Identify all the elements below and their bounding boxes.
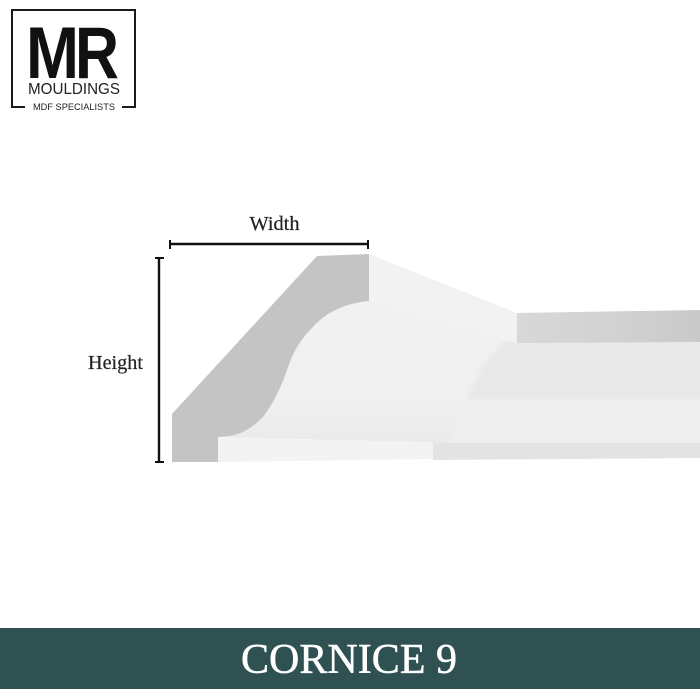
title banner: CORNICE 9 — [241, 637, 457, 683]
moulding: curved front body — [218, 301, 700, 443]
cornice moulding illustration — [172, 254, 700, 462]
moulding: top face — [369, 254, 517, 343]
moulding: receding wall face — [517, 310, 700, 343]
logo: MR Mouldings: MOULDINGS — [28, 81, 120, 98]
moulding: upper receding band — [467, 338, 700, 400]
moulding: lower lip receding face — [433, 443, 700, 460]
width dimension arrow — [170, 240, 368, 249]
logo: MR Mouldings: MDF SPECIALISTS — [33, 102, 115, 113]
height label: Height — [88, 352, 143, 374]
moulding: lower receding band — [450, 400, 700, 444]
width label: Width — [250, 213, 300, 235]
height dimension arrow — [155, 258, 164, 462]
logo: MR Mouldings: R — [75, 13, 119, 94]
logo: MR Mouldings — [12, 10, 135, 113]
moulding: cut end profile — [172, 254, 369, 462]
logo: MR Mouldings: M — [26, 13, 79, 94]
moulding: lower lip front — [218, 437, 433, 462]
title banner — [0, 628, 700, 689]
